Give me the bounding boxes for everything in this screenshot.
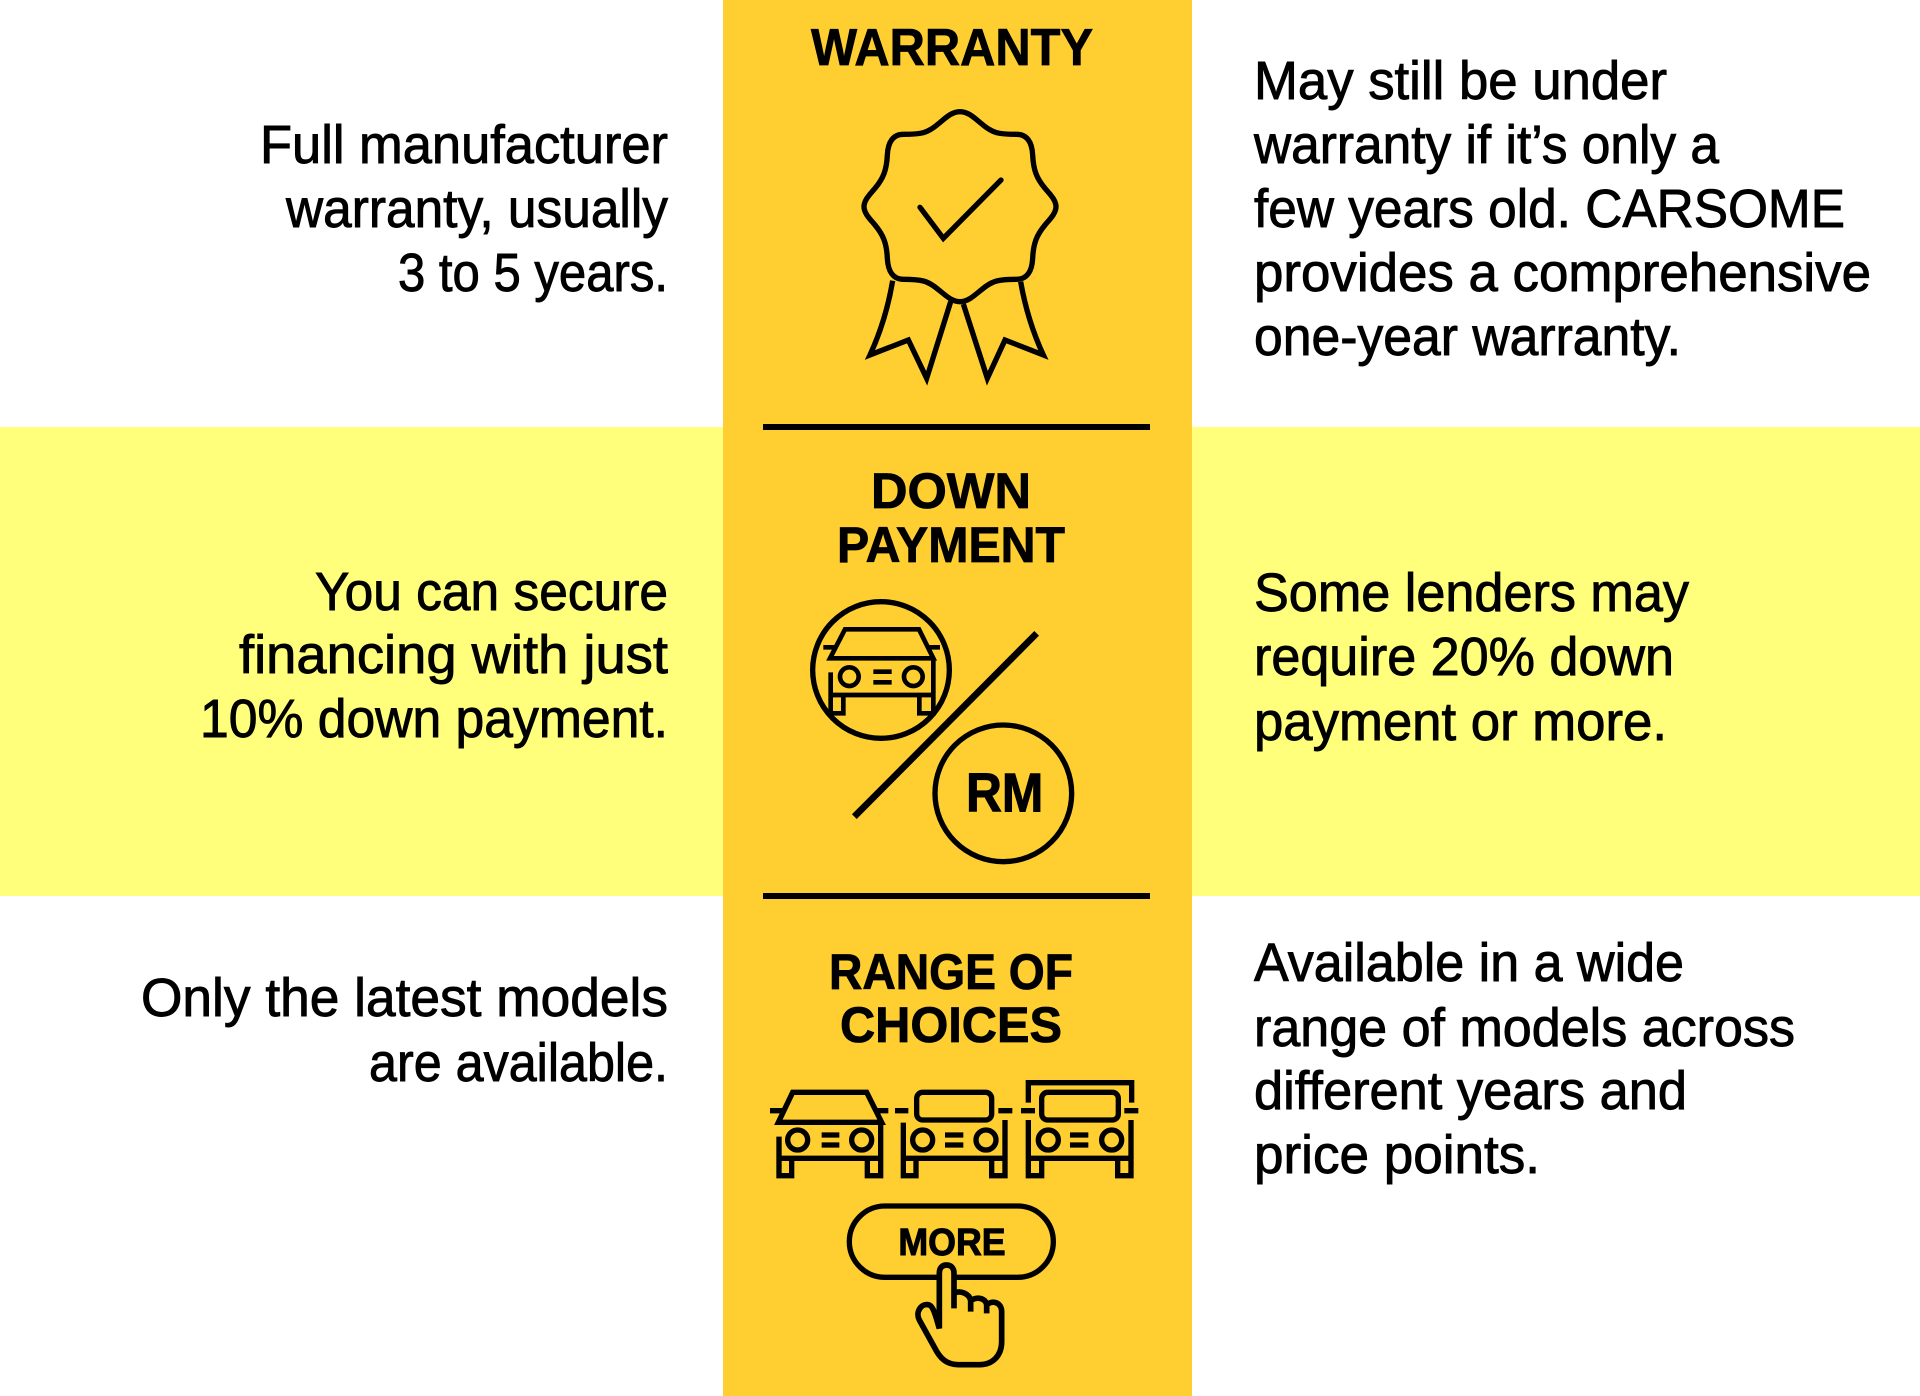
band: down payment row background [0, 427, 1920, 896]
heading: range of choices: RANGE OF [829, 944, 1073, 1000]
text block: down payment, used car [1254, 563, 1689, 752]
text block: warranty, used car: May still be under [1254, 51, 1667, 111]
icon: hatchback [895, 1092, 1012, 1176]
text block: down payment, used car: Some lenders may [1254, 563, 1689, 623]
text block: down payment, used car: require 20% down [1254, 627, 1674, 687]
text block: down payment, new car: financing with just [239, 625, 668, 685]
button: more [849, 1206, 1053, 1277]
button: more: MORE [898, 1221, 1006, 1264]
heading: down payment: PAYMENT [837, 517, 1065, 573]
text block: range of choices, new car: Only the latest models [141, 968, 668, 1028]
icon: car over ringgit percentage: RM [966, 762, 1043, 824]
text block: warranty, used car: one-year warranty. [1254, 307, 1681, 367]
text block: range of choices, used car: range of models across [1254, 998, 1795, 1058]
text block: down payment, new car: You can secure [315, 562, 668, 622]
heading: down payment: DOWN [871, 463, 1031, 519]
icon: SUV [1021, 1083, 1138, 1176]
text block: range of choices, new car: are available. [369, 1033, 668, 1093]
heading: range of choices: CHOICES [840, 997, 1062, 1053]
heading: range of choices [829, 944, 1073, 1053]
text block: warranty, used car: few years old. CARSOME [1254, 179, 1845, 239]
text block: warranty, new car: 3 to 5 years. [398, 243, 668, 303]
heading: warranty: WARRANTY [811, 19, 1093, 77]
icon: three cars and more button with pointing hand [770, 1083, 1138, 1365]
panel: central column [723, 0, 1192, 1396]
icon: sedan [770, 1092, 888, 1176]
icon: warranty rosette with check mark [864, 112, 1056, 378]
text block: range of choices, used car: different years and [1254, 1061, 1687, 1121]
text block: range of choices, used car: Available in a wide [1254, 933, 1684, 993]
heading: down payment [837, 463, 1065, 573]
text block: warranty, used car: warranty if it’s only a [1253, 115, 1720, 175]
text block: warranty, new car [260, 115, 668, 303]
text block: down payment, new car: 10% down payment. [200, 689, 668, 749]
text block: range of choices, used car: price points. [1254, 1125, 1540, 1185]
divider: down payment and range of choices [763, 893, 1150, 899]
text block: down payment, used car: payment or more. [1254, 692, 1667, 752]
text block: warranty, new car: Full manufacturer [260, 115, 668, 175]
text block: warranty, new car: warranty, usually [285, 179, 668, 239]
divider: warranty and down payment [763, 424, 1150, 430]
text block: down payment, new car [200, 562, 668, 749]
icon: car over ringgit percentage [813, 602, 1072, 862]
text block: range of choices, used car [1254, 933, 1795, 1185]
text block: warranty, used car [1253, 51, 1871, 367]
text block: range of choices, new car [141, 968, 668, 1093]
text block: warranty, used car: provides a comprehensive [1254, 243, 1871, 303]
icon: pointing hand [918, 1265, 1002, 1365]
